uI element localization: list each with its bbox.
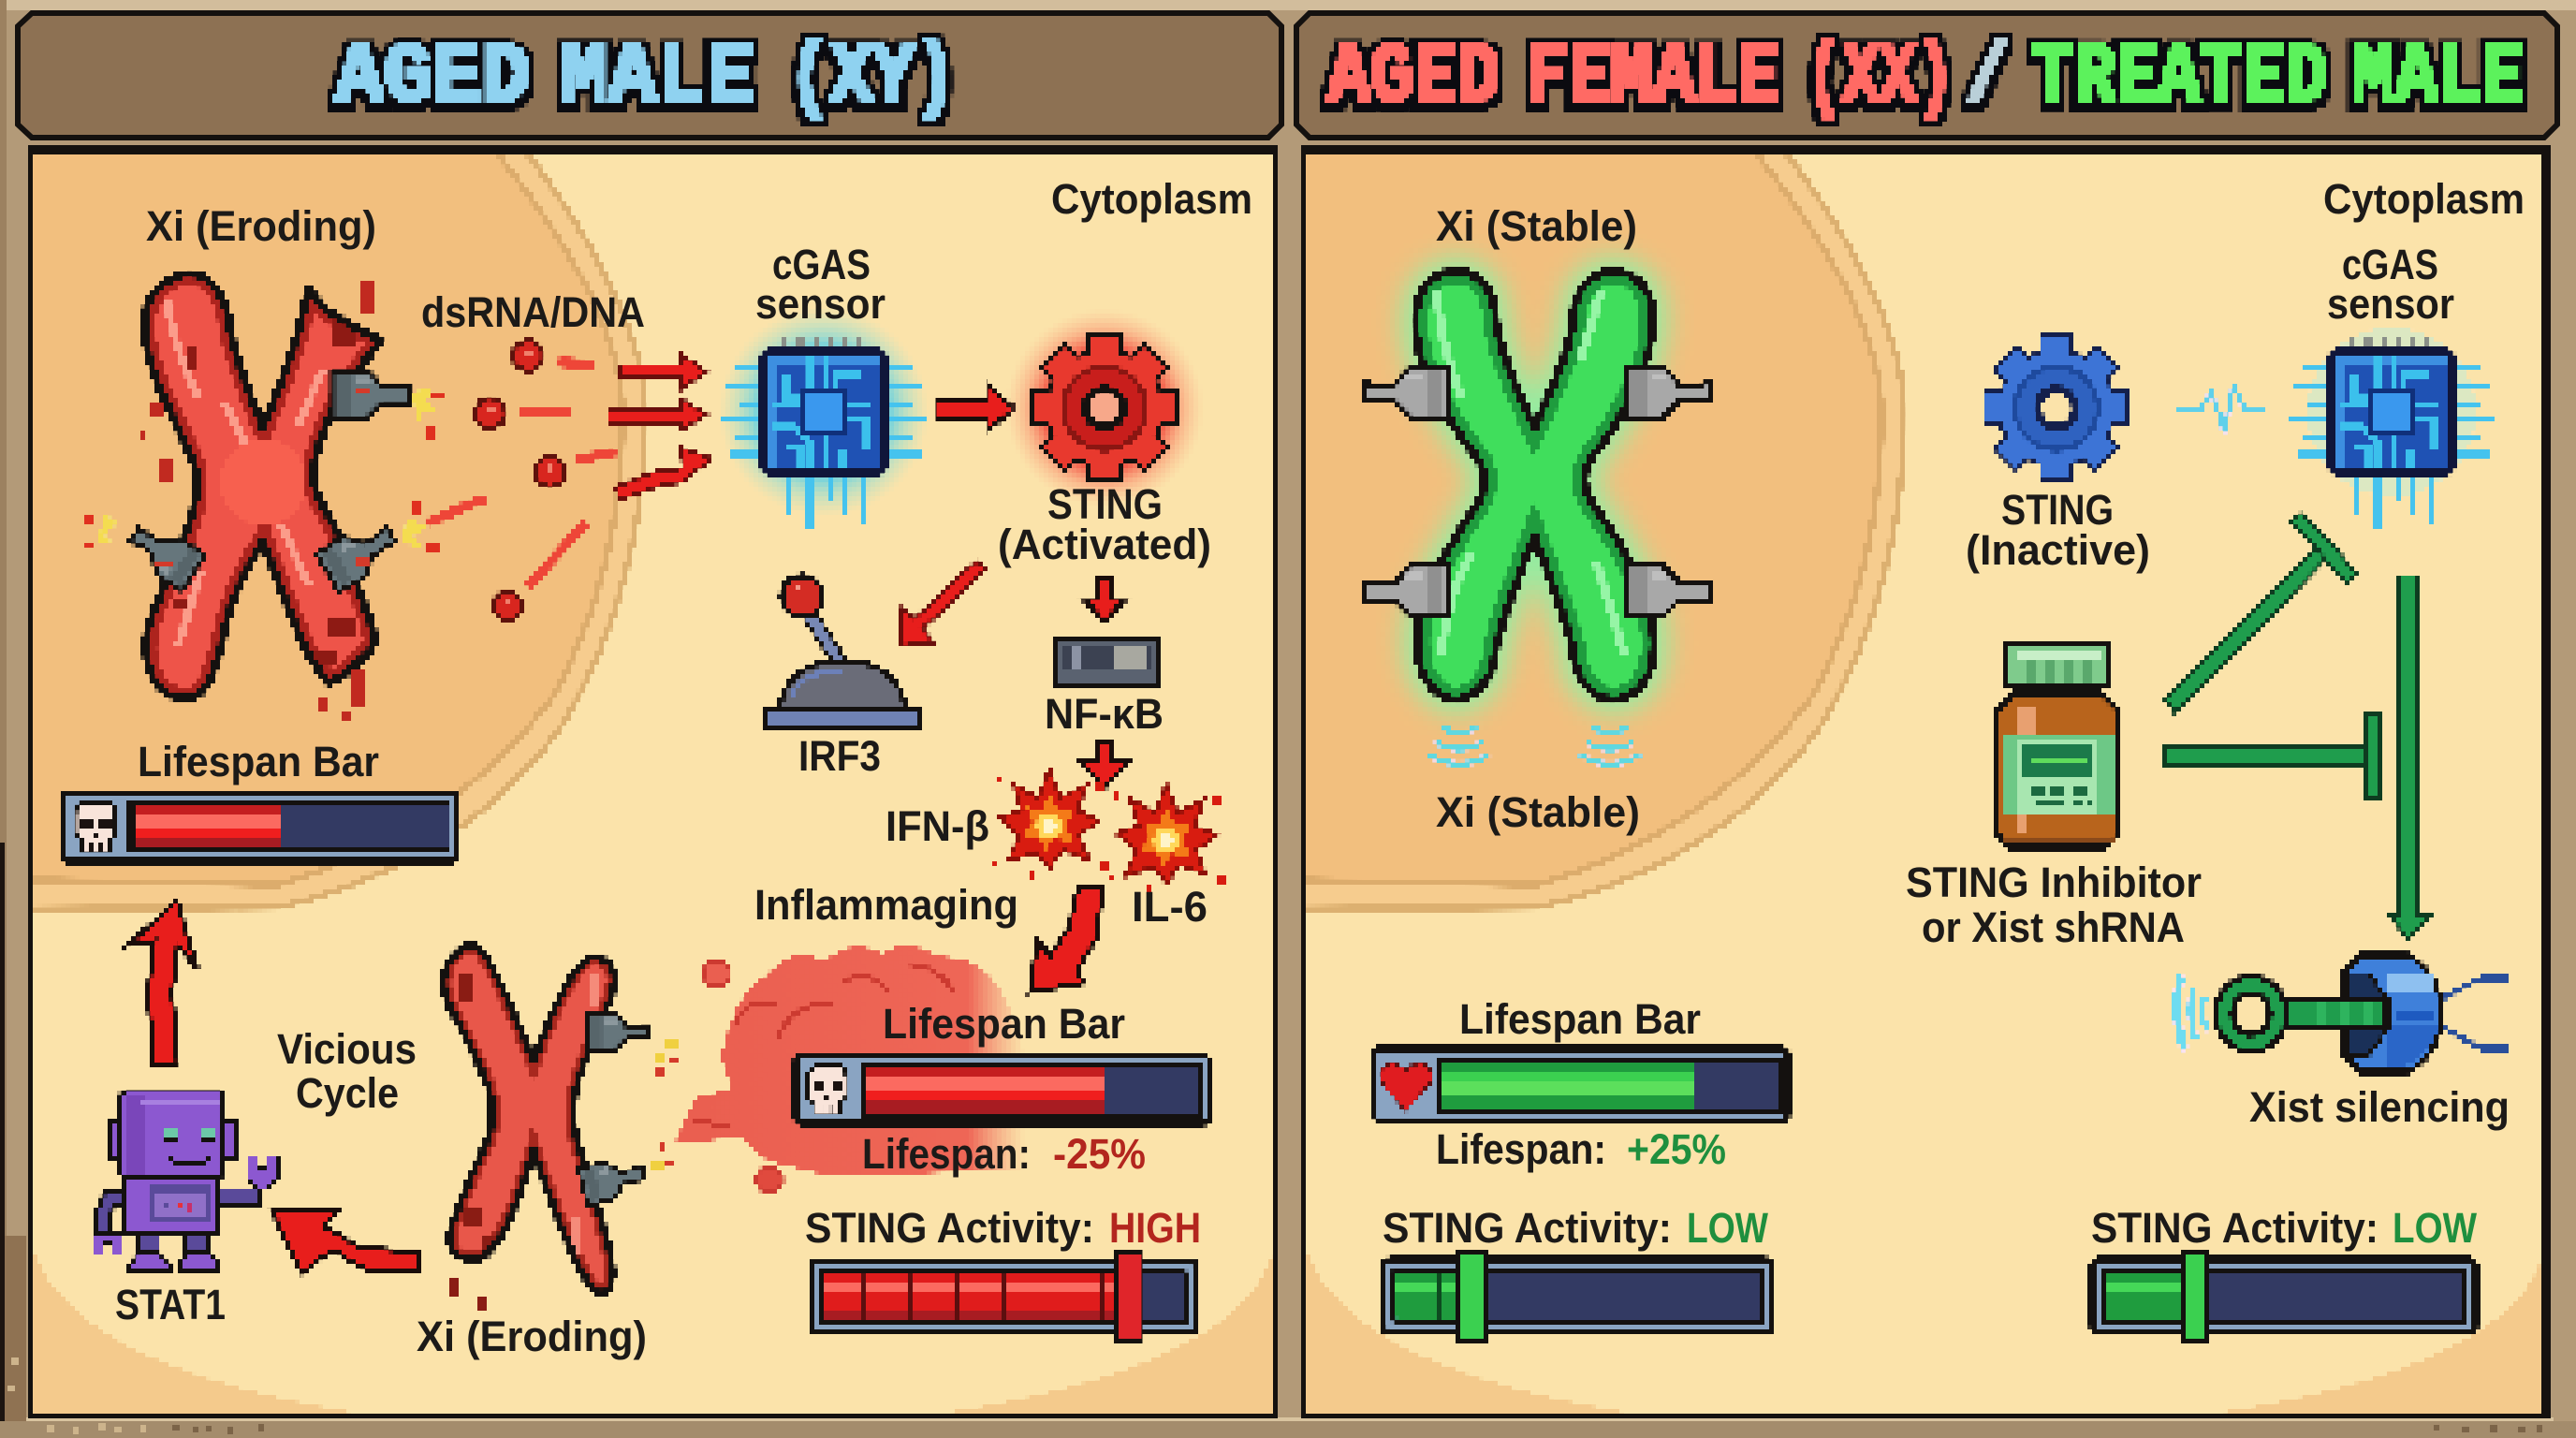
label: cGAS sensor bbox=[2327, 241, 2454, 328]
label: cGAS sensor: cGAS bbox=[772, 241, 871, 288]
heading text: aged male: (XY) bbox=[788, 31, 957, 126]
arrow: NF-kB to cytokines bbox=[1082, 741, 1127, 788]
icon: Xist silencing plug bbox=[2177, 955, 2507, 1072]
label: IRF3: IRF3 bbox=[798, 732, 881, 780]
icon: cGAS sensor chip bbox=[2291, 328, 2493, 528]
arrow: chromosome to STAT1 bbox=[271, 1210, 417, 1273]
sparks bbox=[82, 386, 446, 550]
arrow: STING to NF-kB bbox=[1084, 577, 1125, 622]
label: lifespan bar: Lifespan Bar bbox=[1459, 995, 1701, 1043]
label: STING inhibitor or Xist shRNA bbox=[1906, 858, 2202, 951]
label: sting activity high: HIGH bbox=[1109, 1204, 1201, 1252]
icon: inactive STING gear bbox=[1986, 338, 2127, 478]
header: aged female and treated male bbox=[1296, 13, 2557, 138]
panel: aged female and treated male bbox=[1289, 147, 2549, 1416]
label: cGAS sensor: sensor bbox=[2327, 280, 2454, 328]
robot body bbox=[124, 1178, 218, 1234]
label: lifespan minus 25 percent: -25% bbox=[1053, 1130, 1146, 1178]
lifespan bar: minus 25 percent bbox=[793, 1053, 1211, 1126]
arrow: STING to IRF3 bbox=[900, 560, 986, 646]
robot head bbox=[121, 1091, 224, 1177]
label: STING activated bbox=[998, 480, 1211, 568]
label: cGAS sensor: cGAS bbox=[2342, 241, 2438, 288]
arrow: down to Xist silencing bbox=[2387, 576, 2434, 939]
label: Xist silencing: Xist silencing bbox=[2249, 1083, 2510, 1131]
label: STING inhibitor or Xist shRNA: or Xist shRNA bbox=[1922, 903, 2185, 951]
nucleus bbox=[30, 149, 645, 909]
label: vicious cycle: Cycle bbox=[296, 1069, 399, 1117]
heading text: aged female and treated male: AGED bbox=[1327, 31, 1500, 126]
pulse trace bbox=[2175, 386, 2265, 433]
signal waves bbox=[2177, 976, 2207, 1050]
label: Xi stable top: Xi (Stable) bbox=[1436, 202, 1637, 250]
label: IFN-beta: IFN-β bbox=[886, 802, 989, 850]
robot ears bbox=[110, 1122, 236, 1158]
arrow: cytokines to inflammaging bbox=[1030, 887, 1103, 992]
pixel artwork: aged female and treated male bbox=[1289, 147, 2549, 1416]
drills on eroding chromosome bbox=[123, 370, 412, 593]
labels: aged male bbox=[115, 175, 1252, 1360]
label: inflammaging: Inflammaging bbox=[754, 881, 1018, 929]
icon: IL-6 burst bbox=[1108, 785, 1224, 893]
header: aged male bbox=[18, 13, 1281, 138]
inhibitor bar: horizontal bbox=[2163, 715, 2381, 800]
labels: aged female and treated male bbox=[1383, 175, 2525, 1252]
label: lifespan plus 25 percent: +25% bbox=[1627, 1125, 1726, 1173]
label: NF-kB: NF-κB bbox=[1045, 690, 1164, 738]
label: sting activity low left: STING Activity: bbox=[1383, 1204, 1672, 1252]
icon: NF-kB switch bbox=[1051, 636, 1163, 686]
robot legs bbox=[130, 1234, 219, 1271]
eroding chromosome X bbox=[140, 273, 382, 721]
label: dsRNA/DNA: dsRNA/DNA bbox=[421, 288, 645, 336]
sting activity meter: low left bbox=[1381, 1251, 1775, 1342]
label: cGAS sensor: sensor bbox=[755, 280, 886, 328]
label: STING activated: (Activated) bbox=[998, 521, 1211, 568]
icon: activated STING gear bbox=[1005, 309, 1204, 507]
eroding chromosome small bbox=[444, 945, 615, 1312]
plug ring bbox=[2224, 985, 2278, 1043]
label: cytoplasm: Cytoplasm bbox=[1051, 175, 1252, 223]
heading text: aged female and treated male: MALE bbox=[2351, 31, 2525, 126]
lifespan bar: nucleus bbox=[59, 789, 460, 864]
label: STING inhibitor or Xist shRNA: STING Inhibitor bbox=[1906, 858, 2202, 906]
icon: medicine bottle bbox=[1996, 643, 2119, 847]
heading text: aged female and treated male bbox=[1327, 31, 2525, 126]
protective caps bbox=[1363, 366, 1711, 617]
label: STING inactive: STING bbox=[2001, 486, 2114, 534]
icon: IRF3 joystick bbox=[764, 576, 920, 726]
label: sting activity low left: LOW bbox=[1687, 1204, 1768, 1252]
label: lifespan bar nucleus: Lifespan Bar bbox=[138, 738, 379, 785]
inhibitor bar: diagonal bbox=[2166, 513, 2357, 713]
plug stem bbox=[2287, 1001, 2387, 1029]
label: lifespan minus 25 percent: Lifespan: bbox=[862, 1130, 1031, 1178]
heading text: aged male bbox=[335, 31, 957, 126]
heading text: aged female and treated male: / bbox=[1966, 31, 2009, 126]
label: lifespan bar: Lifespan Bar bbox=[883, 1000, 1125, 1048]
nucleus bbox=[1289, 149, 1904, 909]
icon: IFN-beta burst bbox=[991, 770, 1107, 878]
label: Xi stable bottom: Xi (Stable) bbox=[1436, 788, 1640, 836]
label: STING inactive: (Inactive) bbox=[1966, 526, 2150, 574]
dsRNA and DNA particles bbox=[427, 341, 616, 620]
heading text: aged female and treated male: FEMALE bbox=[1526, 31, 1780, 126]
label: lifespan plus 25 percent: Lifespan: bbox=[1436, 1125, 1606, 1173]
arrow: cGAS to STING bbox=[936, 386, 1015, 431]
icon: heart bbox=[1380, 1064, 1432, 1110]
panel: aged male bbox=[27, 147, 1276, 1416]
arrows: particles to cGAS bbox=[608, 354, 711, 500]
drills on small chromosome bbox=[578, 1013, 678, 1206]
label: sting activity high: STING Activity: bbox=[805, 1204, 1094, 1252]
label: sting activity low right: LOW bbox=[2393, 1204, 2477, 1252]
sting activity meter: high bbox=[808, 1251, 1199, 1342]
label: STAT1: STAT1 bbox=[115, 1281, 226, 1328]
stable chromosome X bbox=[1415, 271, 1654, 700]
heading text: aged female and treated male: (XX) bbox=[1806, 31, 1954, 126]
heading text: aged female and treated male: TREATED bbox=[2031, 31, 2327, 126]
lifespan bar: plus 25 percent bbox=[1370, 1046, 1791, 1123]
label: vicious cycle bbox=[277, 1025, 417, 1117]
label: vicious cycle: Vicious bbox=[277, 1025, 417, 1073]
label: sting activity low right: STING Activity: bbox=[2091, 1204, 2378, 1252]
pixel artwork: aged male bbox=[27, 147, 1276, 1416]
label: STING inactive bbox=[1966, 486, 2150, 574]
stability waves bbox=[1429, 726, 1640, 764]
heading text: aged male: AGED bbox=[335, 31, 530, 126]
icon: cGAS sensor chip bbox=[719, 307, 929, 528]
label: STING activated: STING bbox=[1047, 480, 1163, 528]
label: Xi eroding small: Xi (Eroding) bbox=[417, 1313, 647, 1360]
heading text: aged male: MALE bbox=[559, 31, 755, 126]
label: Xi eroding: Xi (Eroding) bbox=[146, 202, 376, 250]
robot arms bbox=[94, 1156, 277, 1255]
arrow: nucleus feedback up bbox=[127, 901, 198, 1065]
plug cup bbox=[2345, 955, 2441, 1072]
icon: STAT1 robot bbox=[94, 1091, 277, 1271]
inflammaging cloud bbox=[674, 946, 1025, 1193]
sting activity meter: low right bbox=[2089, 1251, 2479, 1342]
label: cytoplasm: Cytoplasm bbox=[2323, 175, 2525, 223]
label: cGAS sensor bbox=[755, 241, 886, 328]
label: IL-6: IL-6 bbox=[1132, 883, 1208, 931]
